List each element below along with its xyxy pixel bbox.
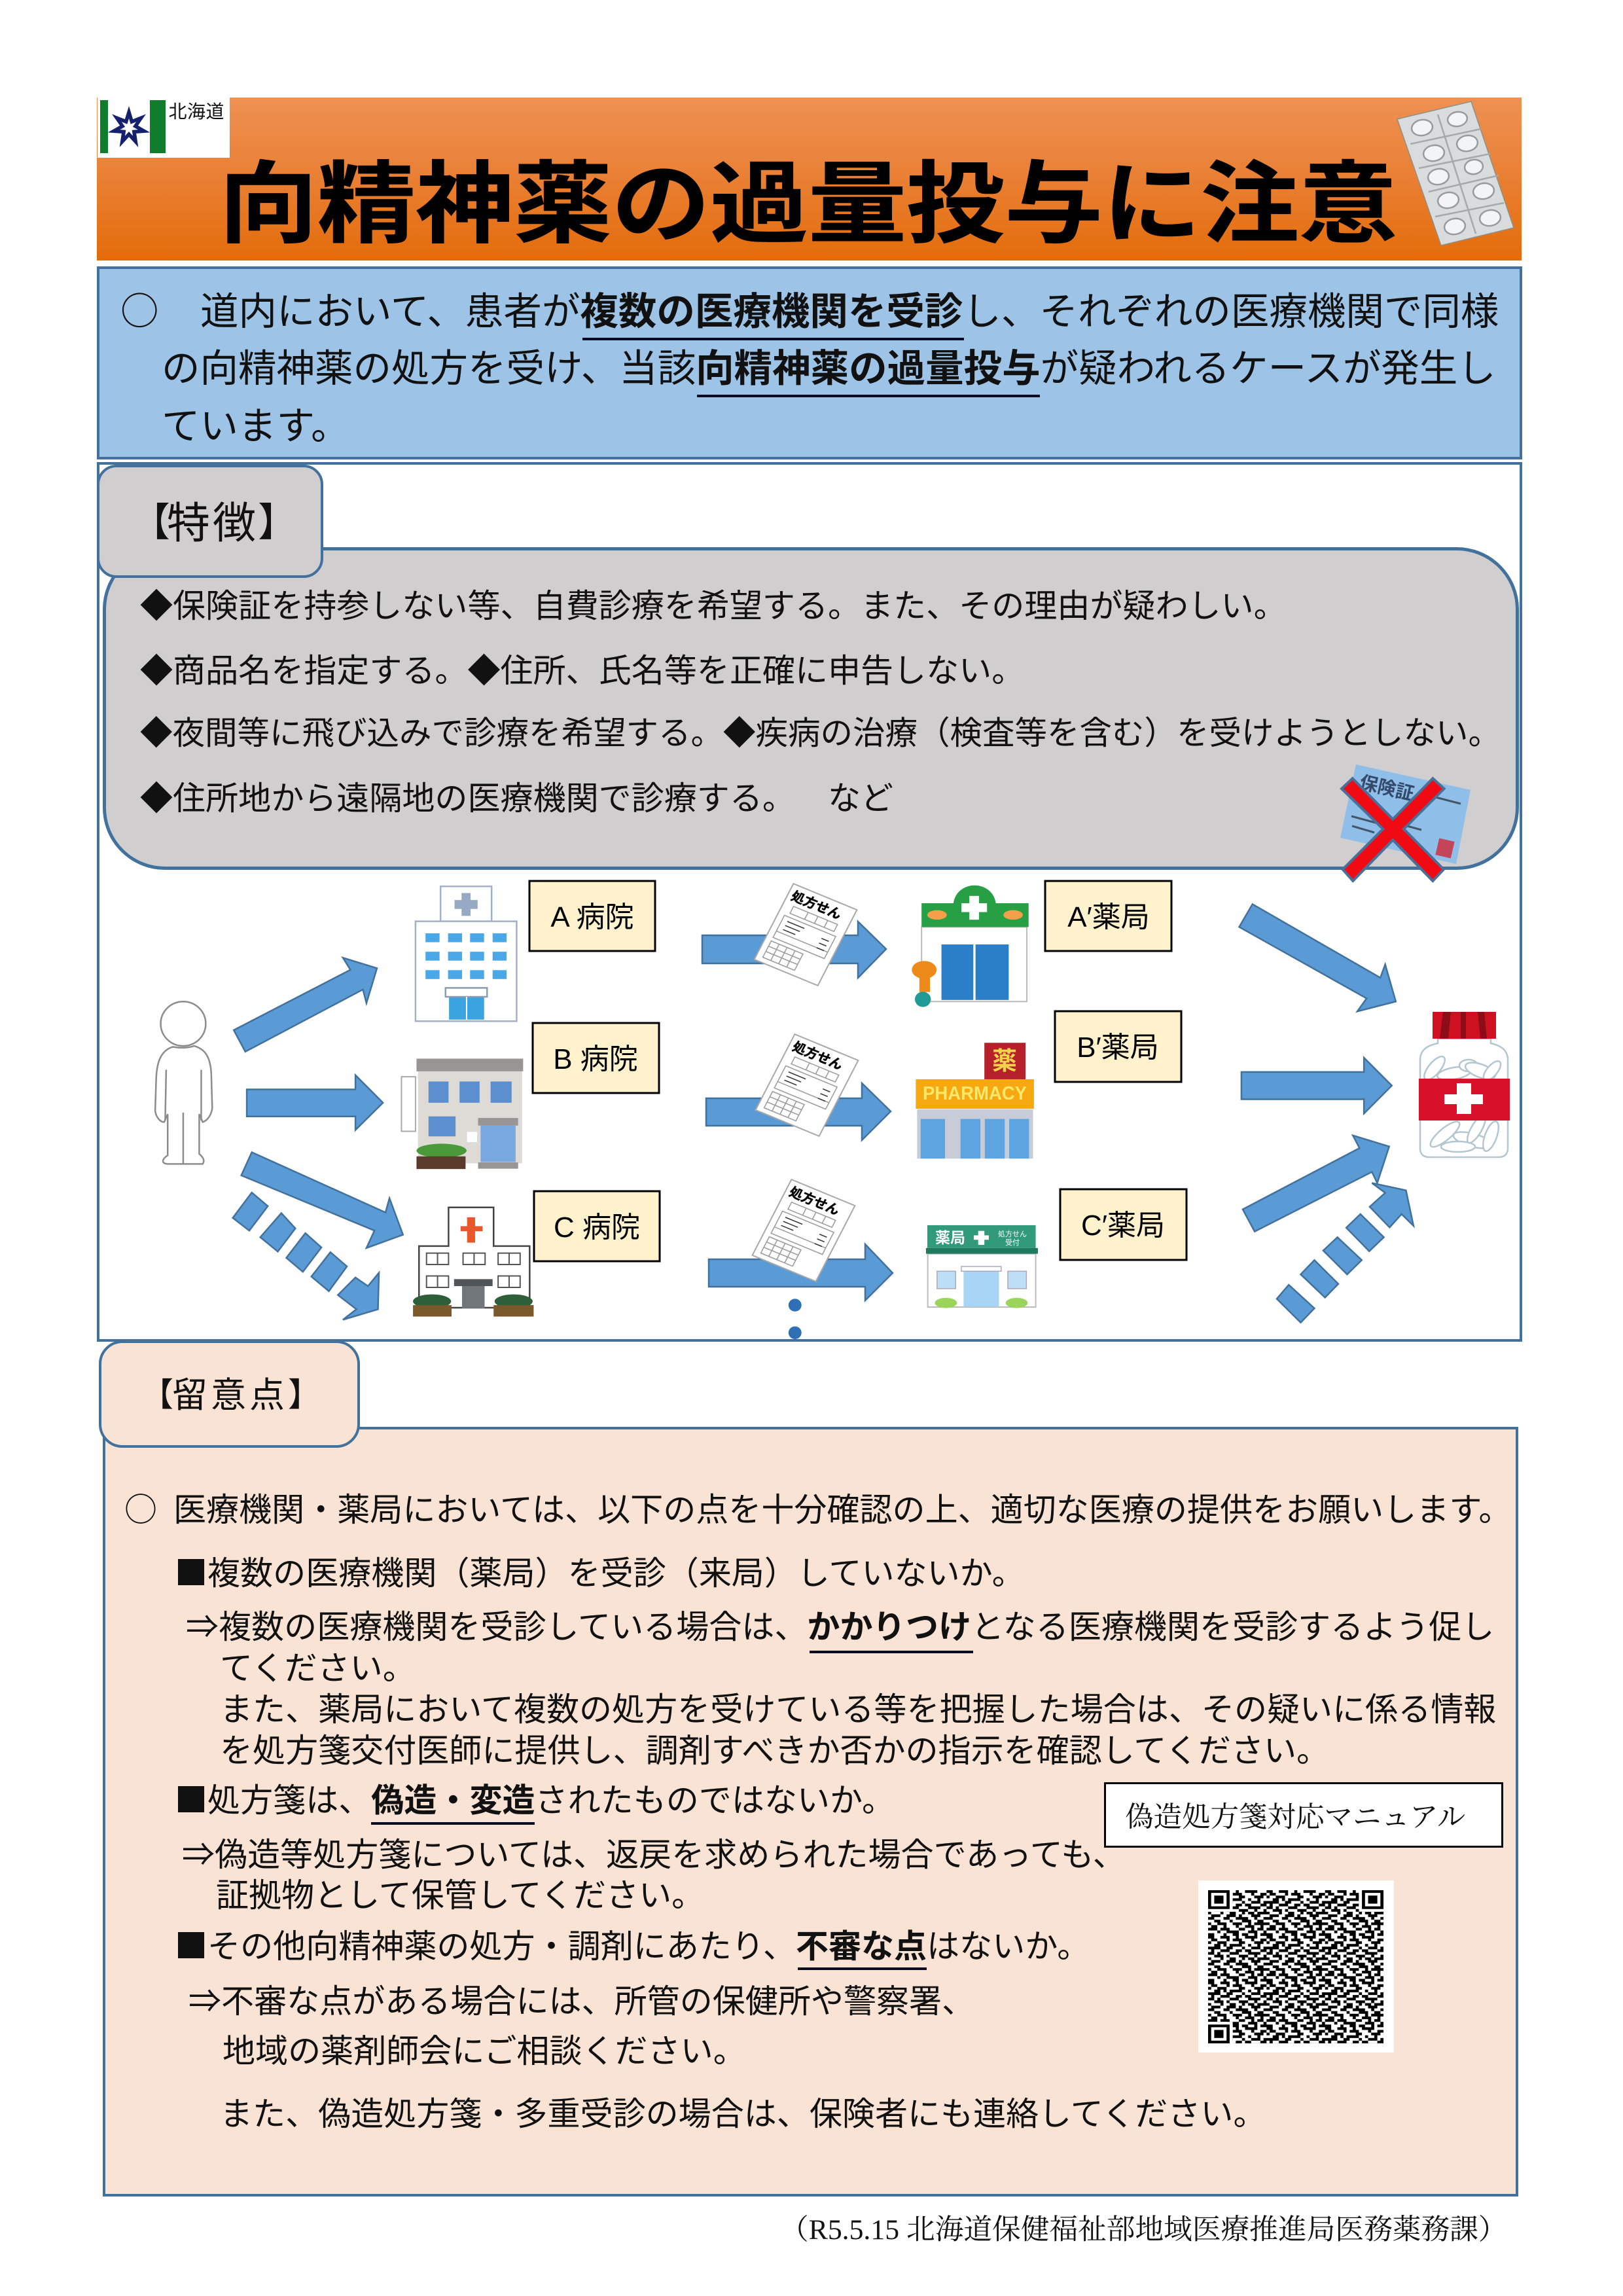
tab: features heading: 】 [258,491,297,548]
tab: features heading: 【 [131,491,170,548]
label: hospital A [529,881,655,951]
text: check 1 guidance: また、薬局において複数の処方を受けている等を把握した場合は、その疑いに係る情報 [220,1683,1496,1731]
text: check 2 guidance [182,1829,1126,1916]
callout: forged prescription manual [1104,1782,1503,1848]
icon: pharmacy C [926,1225,1038,1308]
arrow: dashed from other pharmacies [1277,1183,1414,1323]
text: check 3: ■その他向精神薬の処方・調剤にあたり、不審な点はないか。 [175,1920,1090,1967]
text: request intro [124,1484,1511,1531]
panel: points of attention: ○ [124,1484,157,1531]
text: pharmacy B signage: 薬 [992,1041,1017,1077]
icon: prescription C [753,1179,855,1282]
text: intro line 3: ています。 [162,395,349,450]
tab: points of attention heading: 】 [288,1369,321,1416]
dots: continuation [789,1299,802,1339]
icon: insurance card crossed out: 保険証 [1357,768,1417,806]
icon: hospital A [416,886,516,1021]
icon: insurance card crossed out [1340,764,1471,883]
icon: prescription A: 処方せん [788,886,846,923]
callout: forged prescription manual: 偽造処方箋対応マニュアル [1125,1795,1465,1835]
text: pharmacy C signage: 薬局 [935,1225,965,1247]
tab: points of attention heading: 留意点 [172,1366,288,1418]
text: pharmacy C signage [935,1225,1027,1247]
text: check 2 guidance: 証拠物として保管してください。 [216,1869,704,1916]
icon: pill blister pack [1397,101,1514,246]
label: pharmacy A: A′薬局 [1067,901,1150,933]
label: hospital B: B 病院 [553,1043,638,1075]
label: pharmacy C: C′薬局 [1081,1210,1165,1242]
text: intro line 2: の向精神薬の処方を受け、当該向精神薬の過量投与が疑われるケースが発生し [162,337,1496,393]
panel: intro: ○ [120,280,159,336]
tab: features heading [97,465,323,578]
text: check 1 guidance: を処方箋交付医師に提供し、調剤すべきか否かの指示を確認してください。 [220,1725,1329,1772]
text: check 3 guidance: 地域の薬剤師会にご相談ください。 [223,2025,746,2072]
text: check 2 guidance: ⇒偽造等処方箋については、返戻を求められた場合であっても、 [182,1829,1126,1876]
panel: points of attention: 医療機関・薬局においては、以下の点を十分確認の上、適切な医療の提供をお願いします。 [173,1484,1511,1531]
logo: Hokkaido [98,98,230,158]
text: check 3 guidance [188,1975,974,2072]
text: feature 3: ◆夜間等に飛び込みで診療を希望する。◆疾病の治療（検査等を含む）を受けようとしない。 [140,708,1501,754]
flow diagram [154,880,1510,1339]
icon: pharmacy B [916,1043,1034,1158]
icon: hospital C [413,1208,533,1317]
label: hospital C [534,1191,660,1261]
icon: prescription B: 処方せん [789,1036,847,1073]
panel: intro: 道内において、患者が複数の医療機関を受診し、それぞれの医療機関で同様 [200,280,1499,336]
text: check 3 guidance: ⇒不審な点がある場合には、所管の保健所や警察署、 [188,1975,974,2022]
text: pharmacy B signage [923,1041,1027,1104]
tab: points of attention heading: 【 [141,1369,173,1416]
title: 向精神薬の過量投与に注意 [219,132,1397,261]
tab: points of attention heading [99,1340,360,1448]
arrow: patient to hospital C [241,1152,403,1248]
arrow: hospital B to pharmacy B [706,1083,891,1140]
arrow: patient to hospital B [247,1075,383,1130]
label: pharmacy A [1045,881,1171,951]
icon: prescription A [755,884,857,986]
label: pharmacy C [1060,1189,1186,1260]
icon: pharmacy A [912,886,1029,1007]
arrow: hospital C to pharmacy C [709,1244,893,1300]
text: feature 2: ◆商品名を指定する。◆住所、氏名等を正確に申告しない。 [140,645,1024,692]
arrow: pharmacy C to medicine [1243,1136,1389,1232]
header banner [97,98,1522,260]
QR code [1198,1880,1394,2053]
arrow: patient to hospital A [234,958,377,1052]
text: intro line 1 [120,280,1499,336]
arrow: hospital A to pharmacy A [702,922,886,978]
label: pharmacy B [1055,1011,1181,1082]
label: hospital A: A 病院 [550,901,634,933]
label: pharmacy B: B′薬局 [1077,1031,1159,1064]
text: check 1: ■複数の医療機関（薬局）を受診（来局）していないか。 [175,1547,1025,1594]
panel: points of attention [103,1427,1518,2197]
panel: features and flow [97,462,1522,1342]
text: feature 1: ◆保険証を持参しない等、自費診療を希望する。また、その理由が疑わしい。 [140,580,1287,627]
text: check 1 guidance: ⇒複数の医療機関を受診している場合は、かかりつけとなる医療機関を受診するよう促し [186,1601,1494,1648]
tab: features heading: 特徴 [167,488,259,551]
text: check 2: ■処方箋は、偽造・変造されたものではないか。 [175,1774,895,1821]
panel: intro [97,266,1522,459]
footer: source note: （R5.5.15 北海道保健福祉部地域医療推進局医務薬務課） [780,2214,1507,2246]
arrow: pharmacy A to medicine [1240,904,1396,1011]
text: check 1 guidance: てください。 [220,1642,416,1689]
text: insurer contact: また、偽造処方箋・多重受診の場合は、保険者にも連絡してください。 [220,2088,1266,2135]
arrow: pharmacy B to medicine [1241,1058,1392,1113]
panel: features list [103,547,1519,870]
arrow: dashed to other hospitals [233,1193,379,1319]
text: pharmacy B signage: PHARMACY [923,1083,1027,1104]
icon: patient [155,1001,212,1164]
text: pharmacy C signage: 処方せん [998,1229,1027,1239]
text: check 1 guidance [186,1601,1496,1772]
icon: hospital B [401,1058,523,1169]
label: hospital C: C 病院 [554,1211,640,1244]
icon: medicine bottle [1419,1012,1510,1157]
text: feature 4: ◆住所地から遠隔地の医療機関で診療する。 など [140,772,893,819]
label: hospital B [533,1023,659,1093]
icon: prescription C: 処方せん [786,1181,844,1219]
logo: Hokkaido: 北海道 [169,98,224,124]
text: pharmacy C signage: 受付 [1005,1237,1020,1247]
icon: prescription B [756,1034,858,1136]
